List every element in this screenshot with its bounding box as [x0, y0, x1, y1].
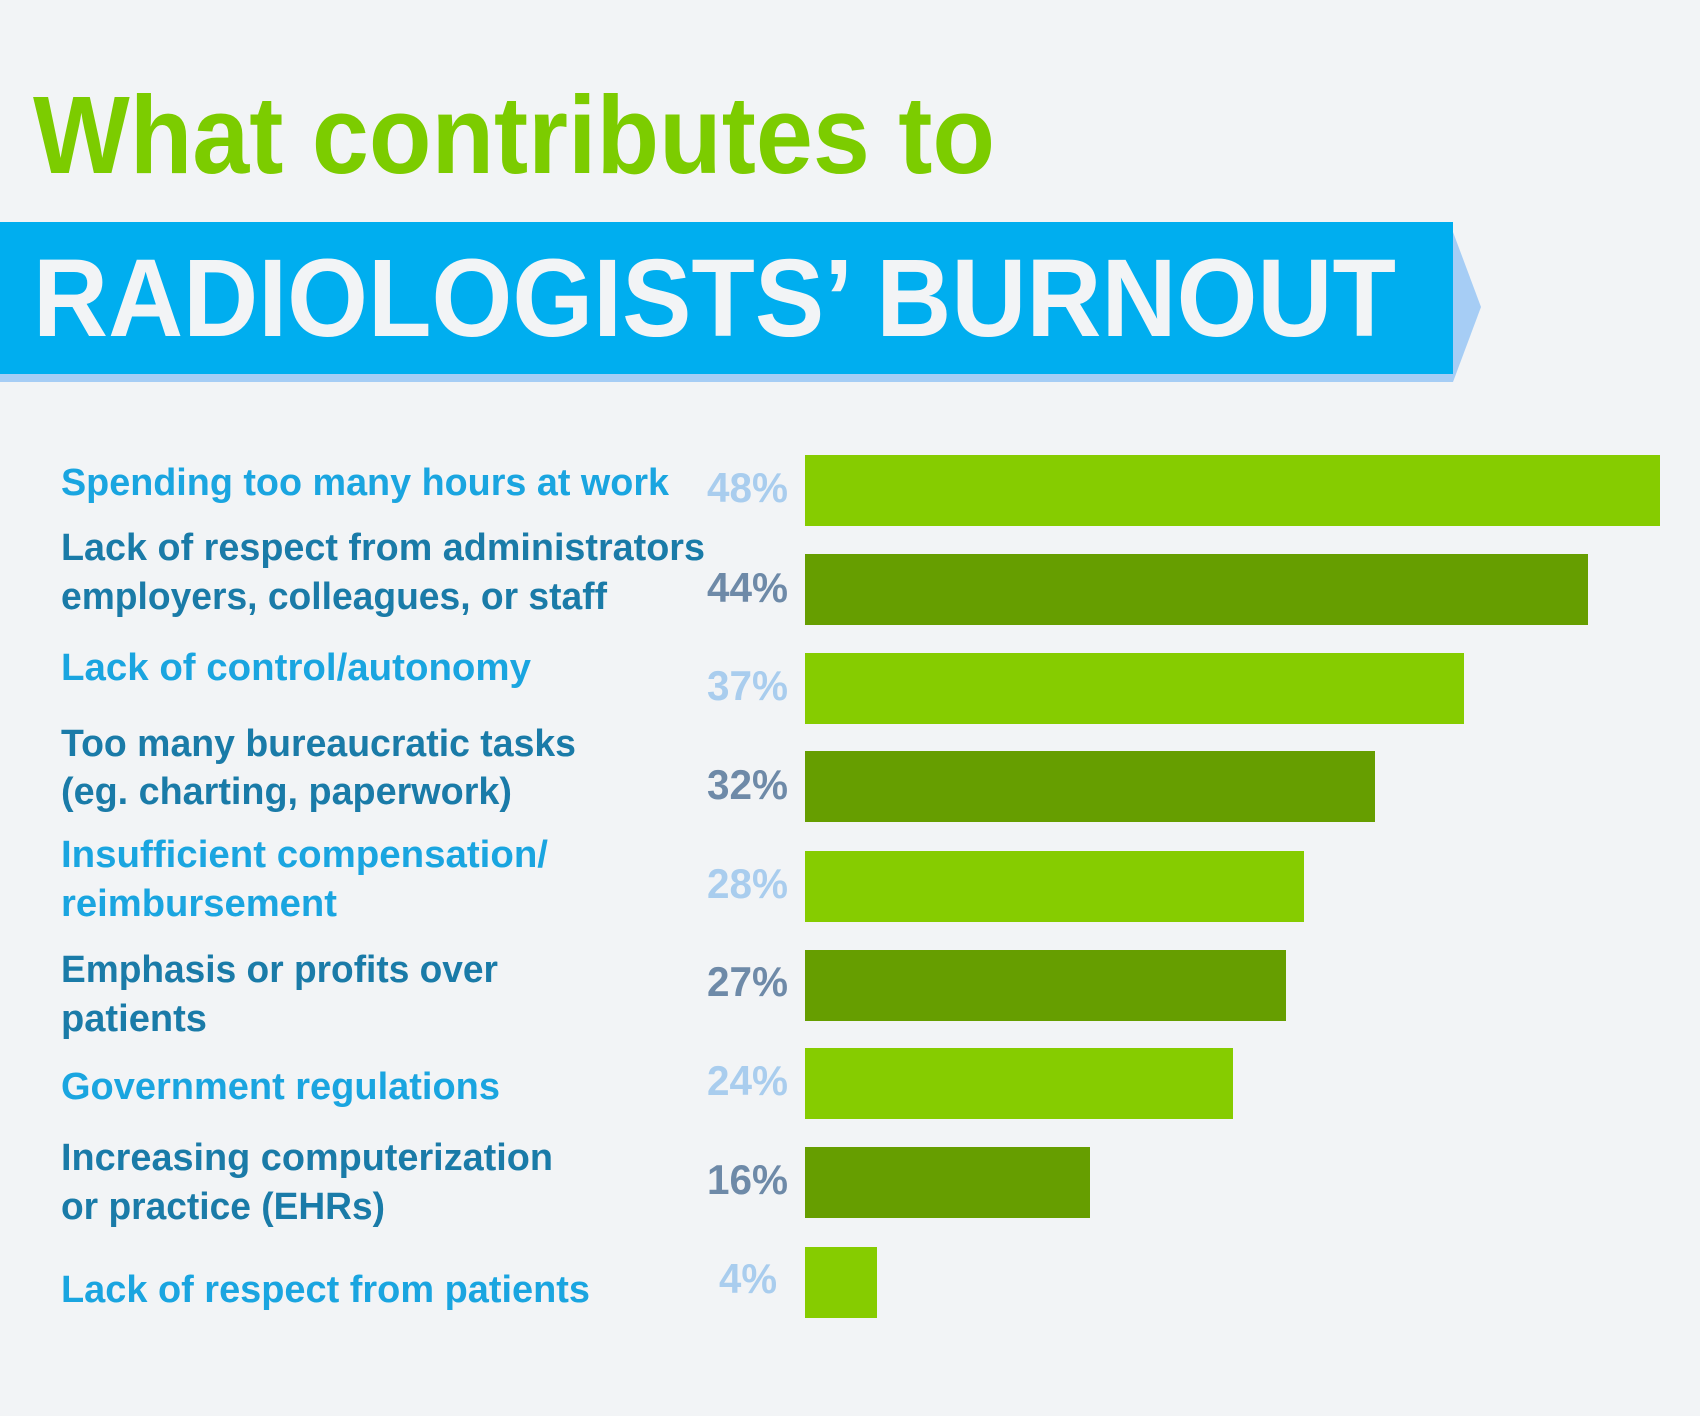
row 5: reimbursement	[61, 883, 337, 925]
row 2	[61, 527, 1588, 625]
row 8: 16%	[707, 1156, 788, 1203]
row 9	[61, 1247, 877, 1318]
row 5: Insufficient compensation/	[61, 834, 548, 876]
banner: RADIOLOGISTS’ BURNOUT	[33, 237, 1396, 360]
row 6: 27%	[707, 958, 788, 1005]
row 5: 28%	[707, 860, 788, 907]
row 6	[61, 949, 1286, 1040]
row 1: 48%	[707, 464, 788, 511]
row 8	[61, 1137, 1090, 1228]
row 6: patients	[61, 998, 207, 1040]
row 6: Emphasis or profits over	[61, 949, 498, 991]
row 3: Lack of control/autonomy	[61, 647, 531, 689]
row 7: Government regulations	[61, 1066, 500, 1108]
row 4: 32%	[707, 761, 788, 808]
row 1	[61, 455, 1660, 526]
row 9: 4%	[719, 1255, 777, 1302]
title: What contributes to	[33, 74, 995, 197]
row 5	[61, 834, 1304, 925]
row 4: Too many bureaucratic tasks	[61, 723, 576, 765]
row 3: 37%	[707, 662, 788, 709]
row 4: (eg. charting, paperwork)	[61, 771, 512, 813]
row 1: Spending too many hours at work	[61, 462, 670, 504]
row 7: 24%	[707, 1057, 788, 1104]
row 8: or practice (EHRs)	[61, 1186, 385, 1228]
row 2: employers, colleagues, or staff	[61, 576, 607, 618]
row 8: Increasing computerization	[61, 1137, 553, 1179]
row 3	[61, 647, 1464, 724]
row 2: 44%	[707, 564, 788, 611]
row 9: Lack of respect from patients	[61, 1269, 590, 1311]
bar chart	[61, 455, 1660, 1318]
row 4	[61, 723, 1375, 822]
row 2: Lack of respect from administrators	[61, 527, 705, 569]
row 7	[61, 1048, 1233, 1119]
